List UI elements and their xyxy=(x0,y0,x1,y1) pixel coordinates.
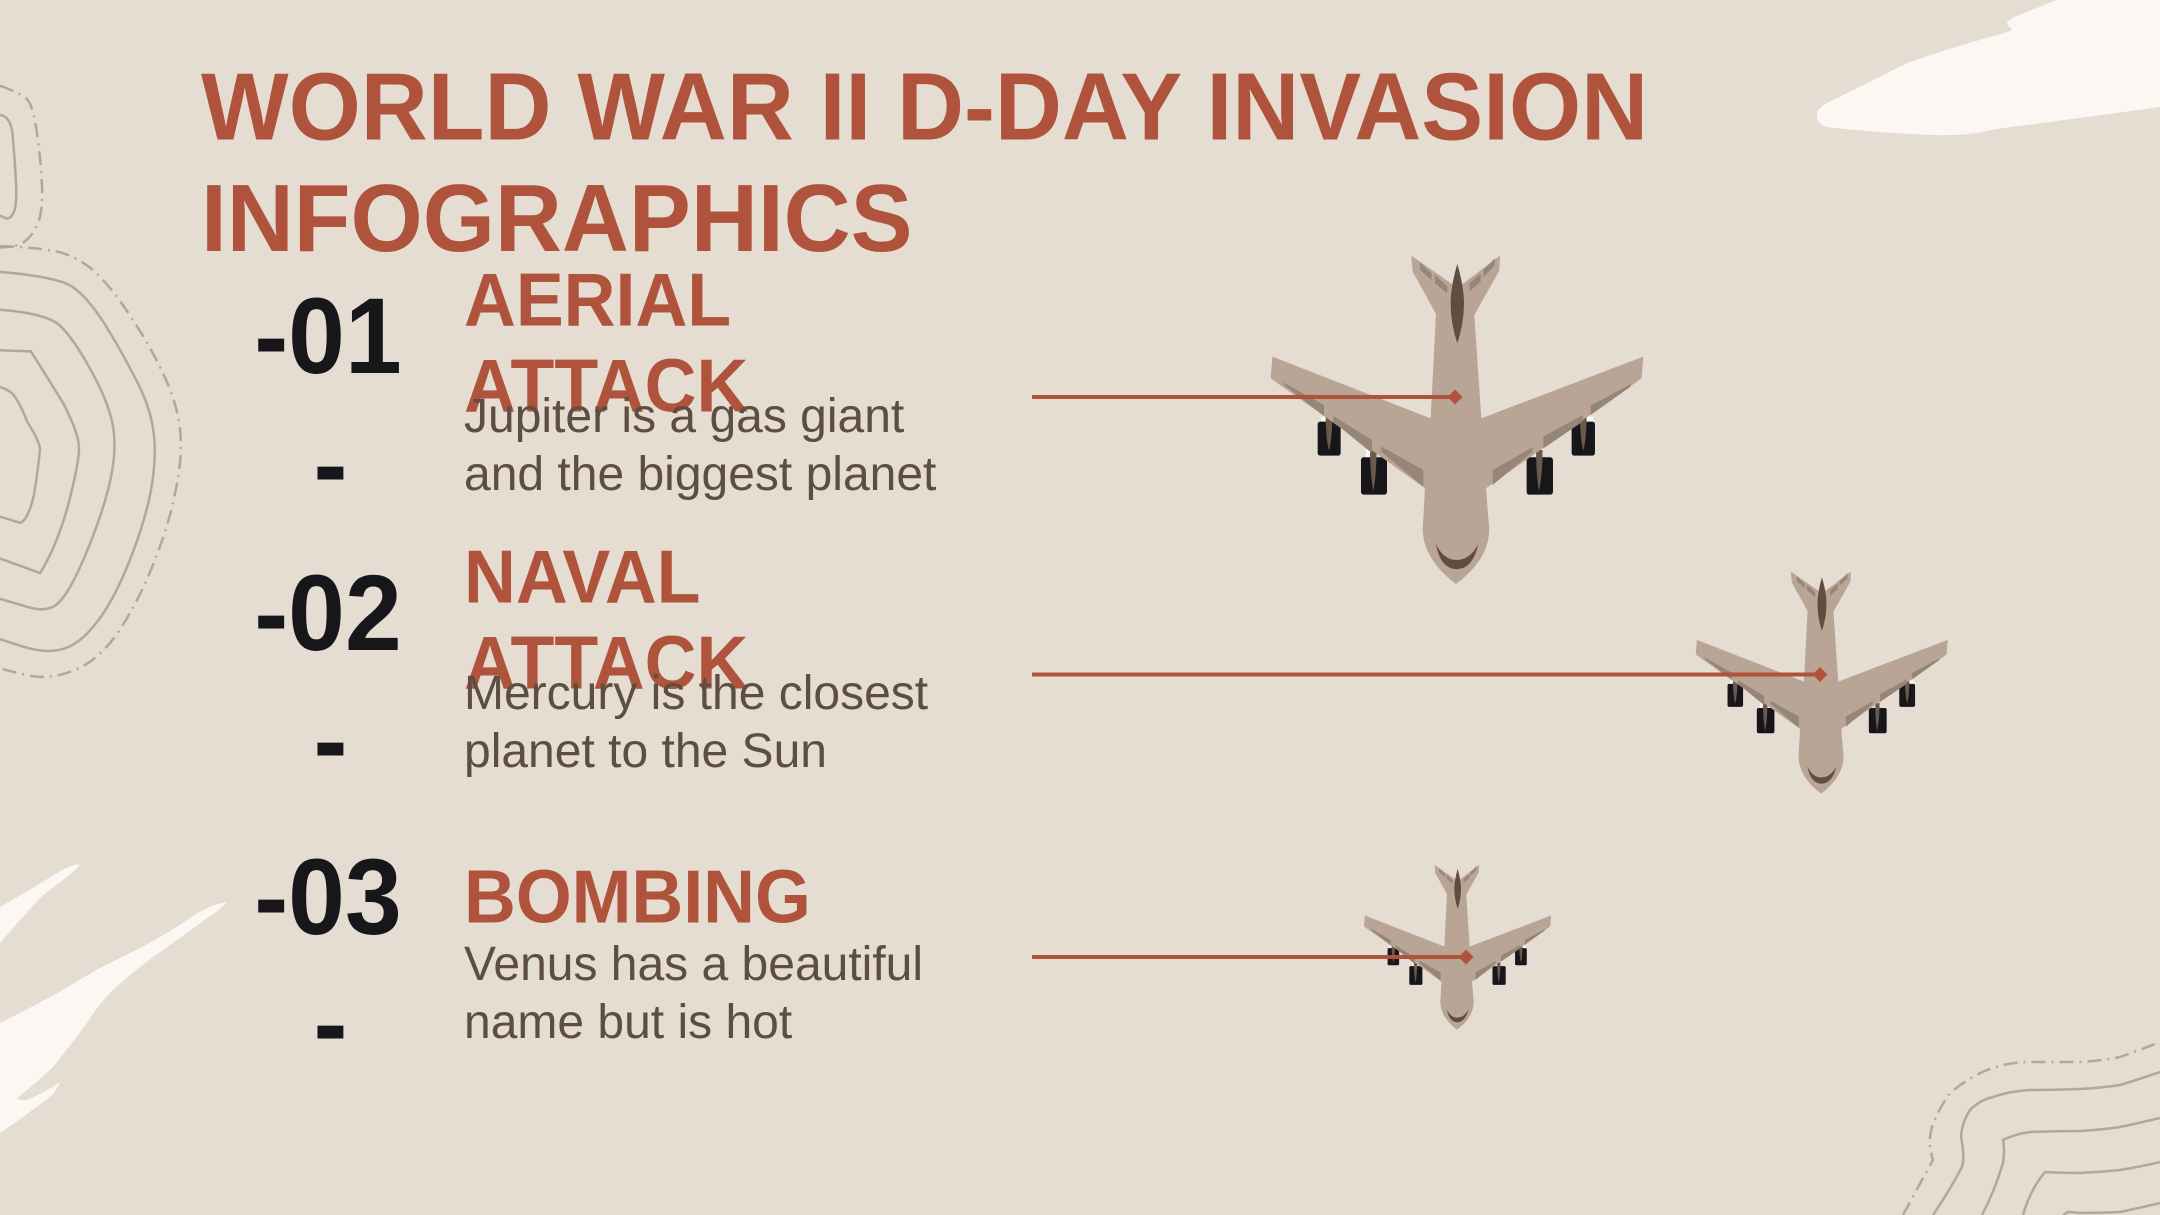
item 3: bombing xyxy=(254,837,1473,1084)
connector line 1 xyxy=(1032,390,1462,404)
description: Mercury: Mercury is the closest xyxy=(464,667,928,720)
title: INFOGRAPHICS xyxy=(201,166,913,272)
title: WORLD WAR II D-DAY INVASION xyxy=(201,54,1648,161)
number 01: -01 xyxy=(254,276,402,397)
connector line 3 xyxy=(1032,950,1474,964)
white brush shape: left upper xyxy=(0,864,80,943)
item 2: naval attack xyxy=(254,535,1827,801)
heading: aerial attack: ATTACK xyxy=(464,344,748,428)
number 02: - xyxy=(313,680,347,801)
heading: bombing: BOMBING xyxy=(464,855,811,939)
heading: naval attack: ATTACK xyxy=(464,621,748,705)
plane 1 xyxy=(1271,256,1643,584)
number 02: -02 xyxy=(254,553,402,674)
description: Mercury: planet to the Sun xyxy=(464,725,827,778)
white brush shape: left lower xyxy=(0,902,227,1133)
description: Jupiter: and the biggest planet xyxy=(464,448,936,501)
number 03: - xyxy=(313,963,347,1084)
item 1: aerial attack xyxy=(254,258,1462,525)
plane 3 xyxy=(1364,865,1551,1030)
white brush shape: top right xyxy=(1817,0,2160,135)
number 03: -03 xyxy=(254,837,402,958)
description: Jupiter: Jupiter is a gas giant xyxy=(464,390,904,443)
heading: naval attack: NAVAL xyxy=(464,535,701,619)
number 01: - xyxy=(313,404,347,525)
contour lines: bottom right xyxy=(1903,1042,2160,1215)
plane 2 xyxy=(1696,572,1948,794)
heading: aerial attack: AERIAL xyxy=(464,258,731,342)
description: Venus: Venus has a beautiful xyxy=(464,938,923,991)
connector line 2 xyxy=(1032,667,1828,682)
contour lines: left xyxy=(0,86,181,677)
description: Venus: name but is hot xyxy=(464,996,792,1049)
